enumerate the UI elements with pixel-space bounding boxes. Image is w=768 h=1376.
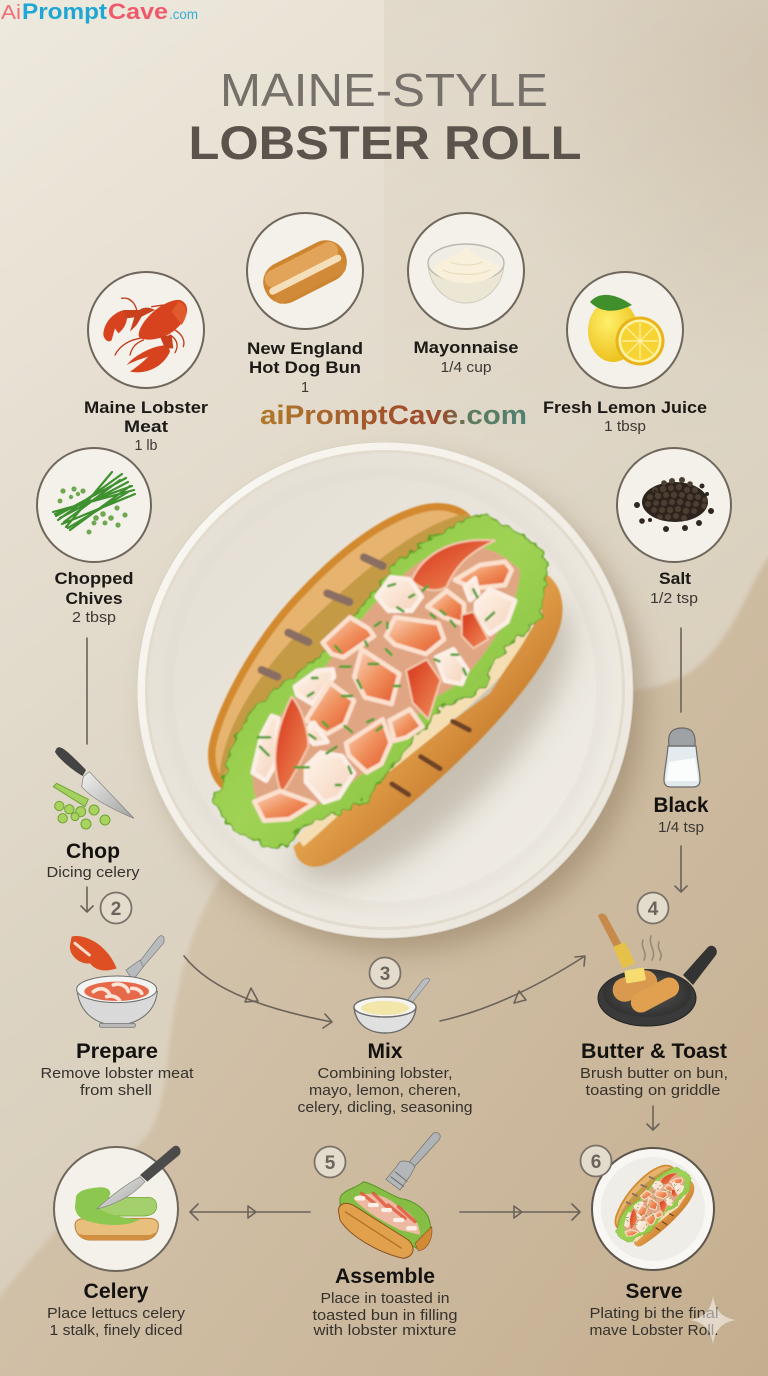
step 4: butter and toast: Brush butter on bun, [580, 1065, 728, 1082]
arrow: mix to toast [440, 956, 585, 1021]
icon: lemon [588, 295, 664, 366]
brand logo: .com [169, 6, 198, 22]
step: celery [47, 1146, 186, 1339]
ingredient: Maine lobster meat: 1 lb [134, 438, 158, 454]
ingredient: mayonnaise: Mayonnaise [414, 338, 518, 357]
ingredient: chopped chives: 2 tbsp [72, 610, 116, 626]
icon: chives [53, 472, 135, 534]
icon: knife over bun [75, 1146, 181, 1240]
ingredient: salt / peppercorns: 1/2 tsp [650, 591, 698, 607]
step 2: prepare: Prepare [76, 1040, 158, 1063]
step 1: chop: Chop [66, 840, 120, 863]
icon: shaker [664, 728, 700, 787]
step 5: assemble: toasted bun in filling [312, 1307, 458, 1324]
step 3: mix: Combining lobster, [318, 1065, 452, 1082]
step 1: chop [46, 747, 140, 881]
step 3: mix: Mix [368, 1040, 403, 1063]
ingredient: hot dog bun: 1 [301, 380, 309, 396]
step 2: prepare [40, 936, 194, 1099]
step badge 3: 3 [380, 964, 390, 985]
step badge 6 [580, 1146, 612, 1176]
step badge 5: 5 [325, 1153, 336, 1174]
arrow: assemble to serve [460, 1204, 580, 1220]
arrow: black to toast [675, 846, 687, 892]
roll shadow [290, 600, 571, 883]
step: celery: Place lettucs celery [47, 1305, 186, 1322]
brand logo [1, 0, 198, 24]
ingredient: salt / peppercorns: Salt [659, 569, 691, 588]
ingredient: chopped chives: Chives [66, 589, 122, 608]
step badge 2: 2 [111, 899, 121, 920]
ingredient: lemon juice [543, 272, 707, 435]
step badge 3 [370, 958, 400, 988]
step badge 4: 4 [648, 899, 659, 920]
ingredient: chopped chives [37, 448, 151, 626]
lobster roll [208, 503, 563, 867]
icon: mayo bowl [428, 244, 504, 303]
icon: bowl with claw and fork [70, 936, 164, 1027]
step 5: assemble [312, 1132, 458, 1339]
step 5: assemble: with lobster mixture [312, 1322, 456, 1339]
title: MAINE-STYLE [220, 64, 548, 116]
icon: small roll with fork [338, 1132, 440, 1258]
connector: chives to chop [86, 638, 88, 744]
ingredient: mayonnaise [408, 213, 524, 376]
ingredient: chopped chives: Chopped [54, 569, 134, 588]
ingredient: Maine lobster meat [84, 272, 208, 454]
sparkle watermark [690, 1296, 736, 1344]
step 3: mix [298, 978, 472, 1116]
arrow: assemble to celery [190, 1204, 310, 1220]
icon: plated roll [615, 1165, 694, 1247]
dinner plate [137, 442, 633, 938]
step 2: prepare: from shell [80, 1082, 152, 1099]
ingredient: black pepper: Black [654, 794, 709, 817]
step 6: serve [590, 1148, 718, 1339]
step: celery: Celery [84, 1280, 149, 1303]
ingredient: hot dog bun: New England [247, 339, 363, 358]
ingredient: salt / peppercorns [617, 448, 731, 607]
icon: bun [256, 233, 354, 311]
step 3: mix: mayo, lemon, cheren, [309, 1082, 461, 1099]
step 4: butter and toast: toasting on griddle [586, 1082, 720, 1099]
icon: mixing bowl [354, 978, 430, 1033]
ingredient: mayonnaise: 1/4 cup [440, 360, 492, 376]
step: celery: 1 stalk, finely diced [50, 1322, 182, 1339]
plate shadow [152, 460, 644, 952]
arrow: prepare to mix [184, 956, 332, 1028]
step badge 4 [638, 892, 668, 924]
step 5: assemble: Place in toasted in [320, 1290, 450, 1307]
brand logo: Ai [1, 2, 21, 24]
ingredient: Maine lobster meat: Maine Lobster [84, 398, 208, 417]
step 6: serve: Serve [626, 1280, 682, 1303]
step 4: butter and toast: Butter & Toast [581, 1040, 727, 1063]
arrow: toast to serve [647, 1106, 659, 1130]
arrow: chop to prepare [81, 887, 93, 912]
step 6: serve: Plating bi the final [590, 1305, 718, 1322]
title: LOBSTER ROLL [188, 116, 582, 169]
step 4: butter and toast [580, 913, 728, 1099]
ingredient: lemon juice: Fresh Lemon Juice [543, 398, 707, 417]
icon: pan with buns [598, 913, 717, 1026]
title [188, 64, 582, 169]
ingredient: hot dog bun: Hot Dog Bun [249, 358, 361, 377]
ingredient: black pepper: 1/4 tsp [658, 820, 704, 836]
step 5: assemble: Assemble [335, 1265, 435, 1288]
icon: knife and celery [53, 747, 134, 829]
connector: salt to black [680, 628, 682, 712]
step badge 5 [314, 1146, 346, 1178]
icon: peppercorns [634, 477, 714, 532]
watermark: aiPromptCave.com [260, 400, 527, 430]
ingredient: black pepper [654, 728, 709, 836]
ingredient: lemon juice: 1 tbsp [604, 419, 646, 435]
step 6: serve: mave Lobster Roll. [590, 1322, 718, 1339]
step badge 2 [100, 892, 132, 924]
step 1: chop: Dicing celery [46, 864, 140, 881]
step 2: prepare: Remove lobster meat [40, 1065, 194, 1082]
step badge 6: 6 [591, 1152, 601, 1173]
icon: lobster [103, 298, 187, 372]
ingredient: hot dog bun [247, 213, 363, 396]
step 3: mix: celery, dicling, seasoning [298, 1099, 472, 1116]
ingredient: Maine lobster meat: Meat [124, 417, 168, 436]
